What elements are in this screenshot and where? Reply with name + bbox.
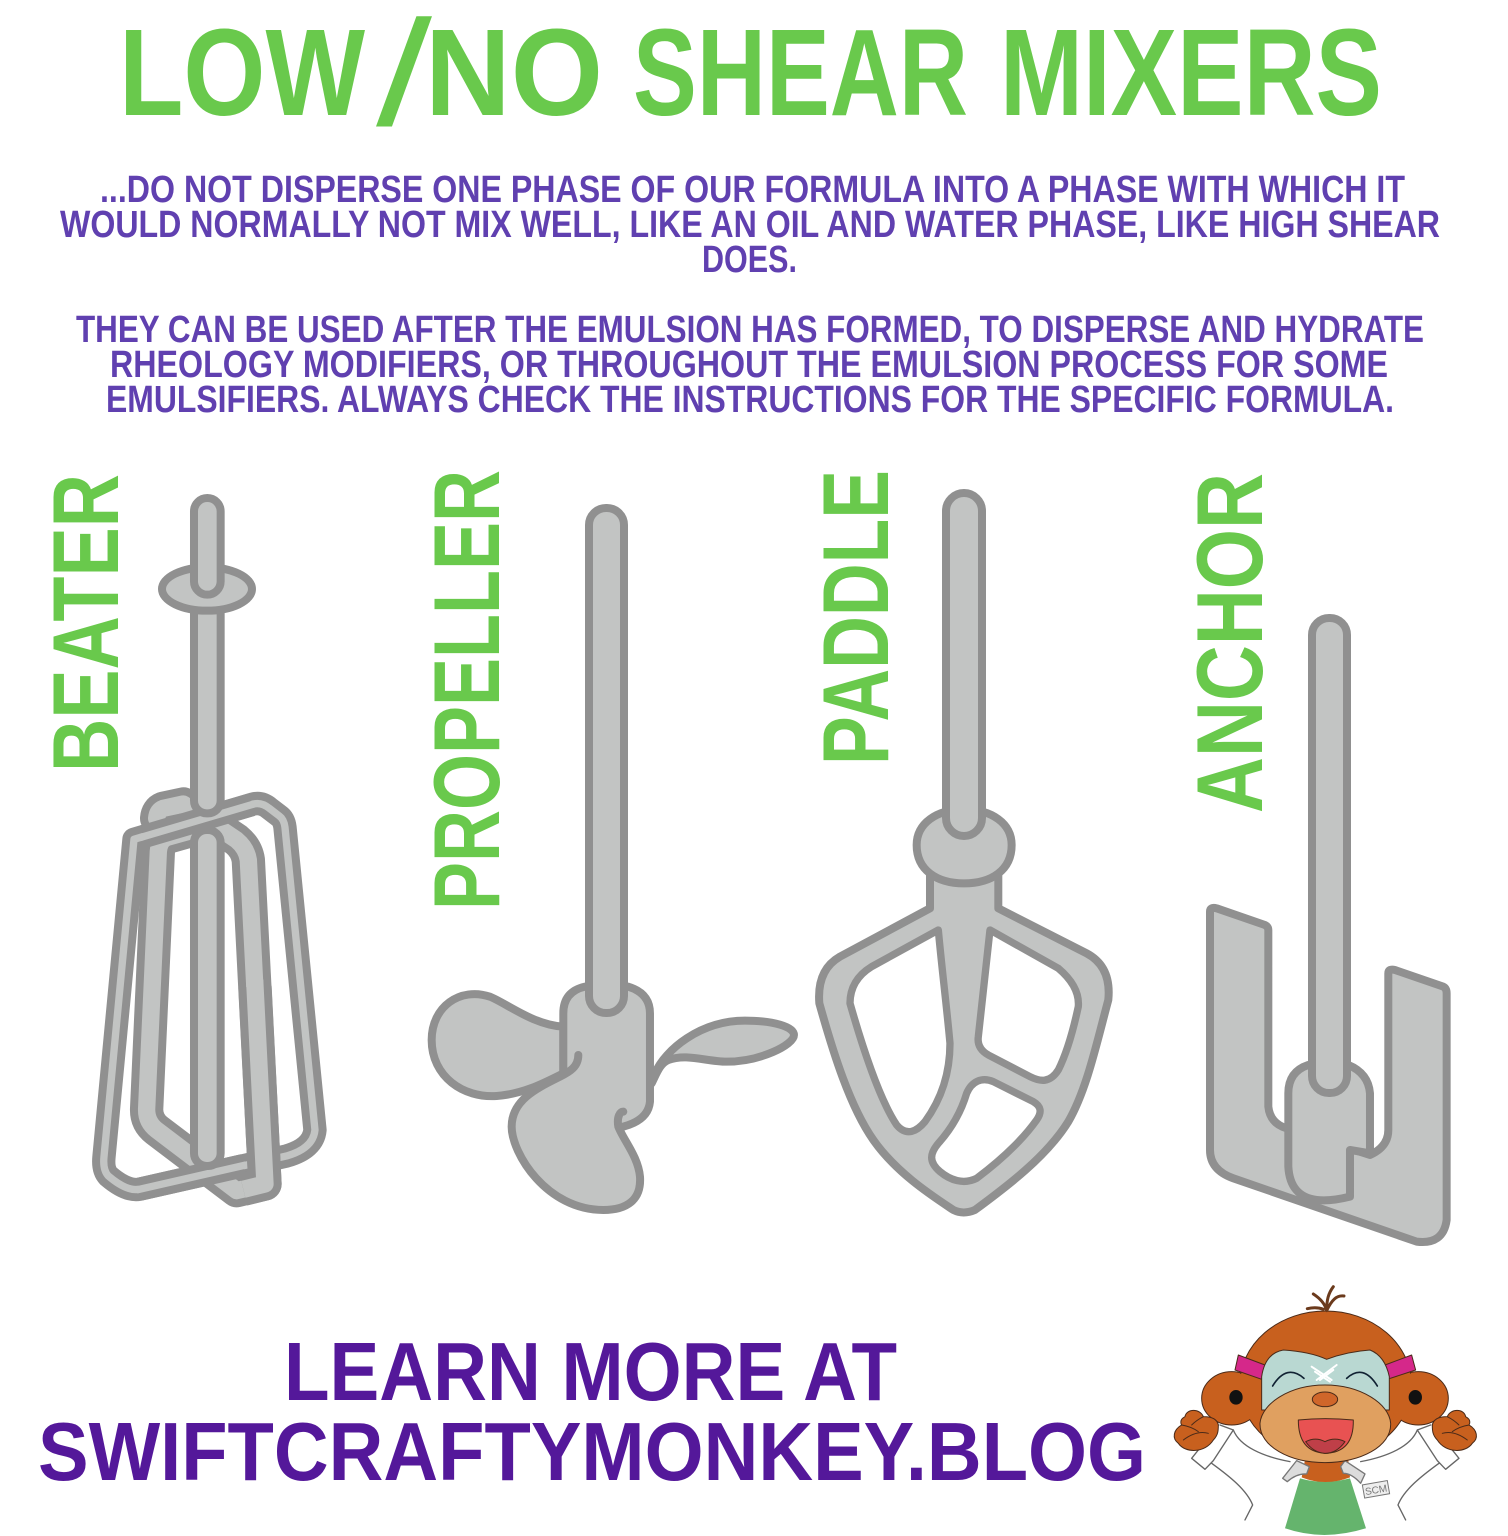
hair [1307,1287,1344,1311]
shaft [1312,618,1347,1093]
collar [917,809,1012,883]
title: MIXERS [1000,5,1382,142]
text block: what low shear mixers do [60,169,1440,281]
mouth [1298,1419,1353,1453]
hub [563,987,650,1127]
label: paddle: PADDLE [803,470,908,765]
right arm of broad wire [243,980,265,1189]
title: LOW [119,5,365,142]
title: SHEAR [633,5,968,142]
title: NO [425,5,603,142]
call to action: SWIFTCRAFTYMONKEY.BLOG [38,1405,1146,1498]
lab coat arm: right [1361,1425,1459,1520]
outer wire loop [104,804,315,1190]
icon: beater mixer [104,498,315,1191]
headband [1235,1355,1416,1379]
label: anchor: ANCHOR [1177,473,1282,813]
eyes [1273,1372,1377,1386]
icon: propeller mixer [432,508,794,1210]
fist creases [1182,1417,1469,1440]
paddle body [819,870,1109,1212]
upper shaft [194,593,221,813]
shaft [589,508,624,1013]
shaft tip [194,498,221,595]
nose [1312,1392,1338,1407]
lab coat arm: left [1192,1425,1290,1520]
badge: SCM [1364,1483,1388,1498]
call to action [38,1325,1146,1498]
bottom opening [932,1080,1040,1181]
text block: what low shear mixers do: DOES. [702,239,797,281]
top wire crossing [140,804,254,838]
right opening [978,930,1078,1080]
neck [1302,1460,1350,1482]
icon: paddle mixer [819,493,1109,1212]
text block: when to use them [76,309,1424,421]
ear-head join [1205,1373,1445,1424]
icon: monkey mascot [1174,1287,1476,1535]
glint on goggles [1312,1365,1337,1382]
label: propeller: PROPELLER [414,470,519,910]
bottom blade [512,1055,640,1210]
inner broad wire [147,804,265,1191]
hub [1288,1065,1370,1200]
green shirt [1285,1478,1366,1535]
call to action: LEARN MORE AT [284,1325,897,1418]
coat collars [1283,1461,1365,1483]
ear holes [1229,1390,1422,1405]
disc [162,567,252,611]
icon: anchor mixer [1210,618,1447,1242]
lower wire crossing [137,1165,246,1190]
lower rod [194,830,221,1166]
goggles [1262,1350,1389,1410]
tongue [1306,1439,1345,1453]
left opening [850,930,950,1132]
shaft [946,493,982,836]
fists [1174,1410,1476,1450]
label: beater: BEATER [33,474,138,772]
left blade [432,994,563,1096]
title [119,0,1382,157]
anchor blade [1210,908,1447,1242]
head [1240,1311,1412,1459]
right blade [652,1021,794,1083]
muzzle [1260,1385,1391,1463]
ears [1202,1372,1448,1425]
